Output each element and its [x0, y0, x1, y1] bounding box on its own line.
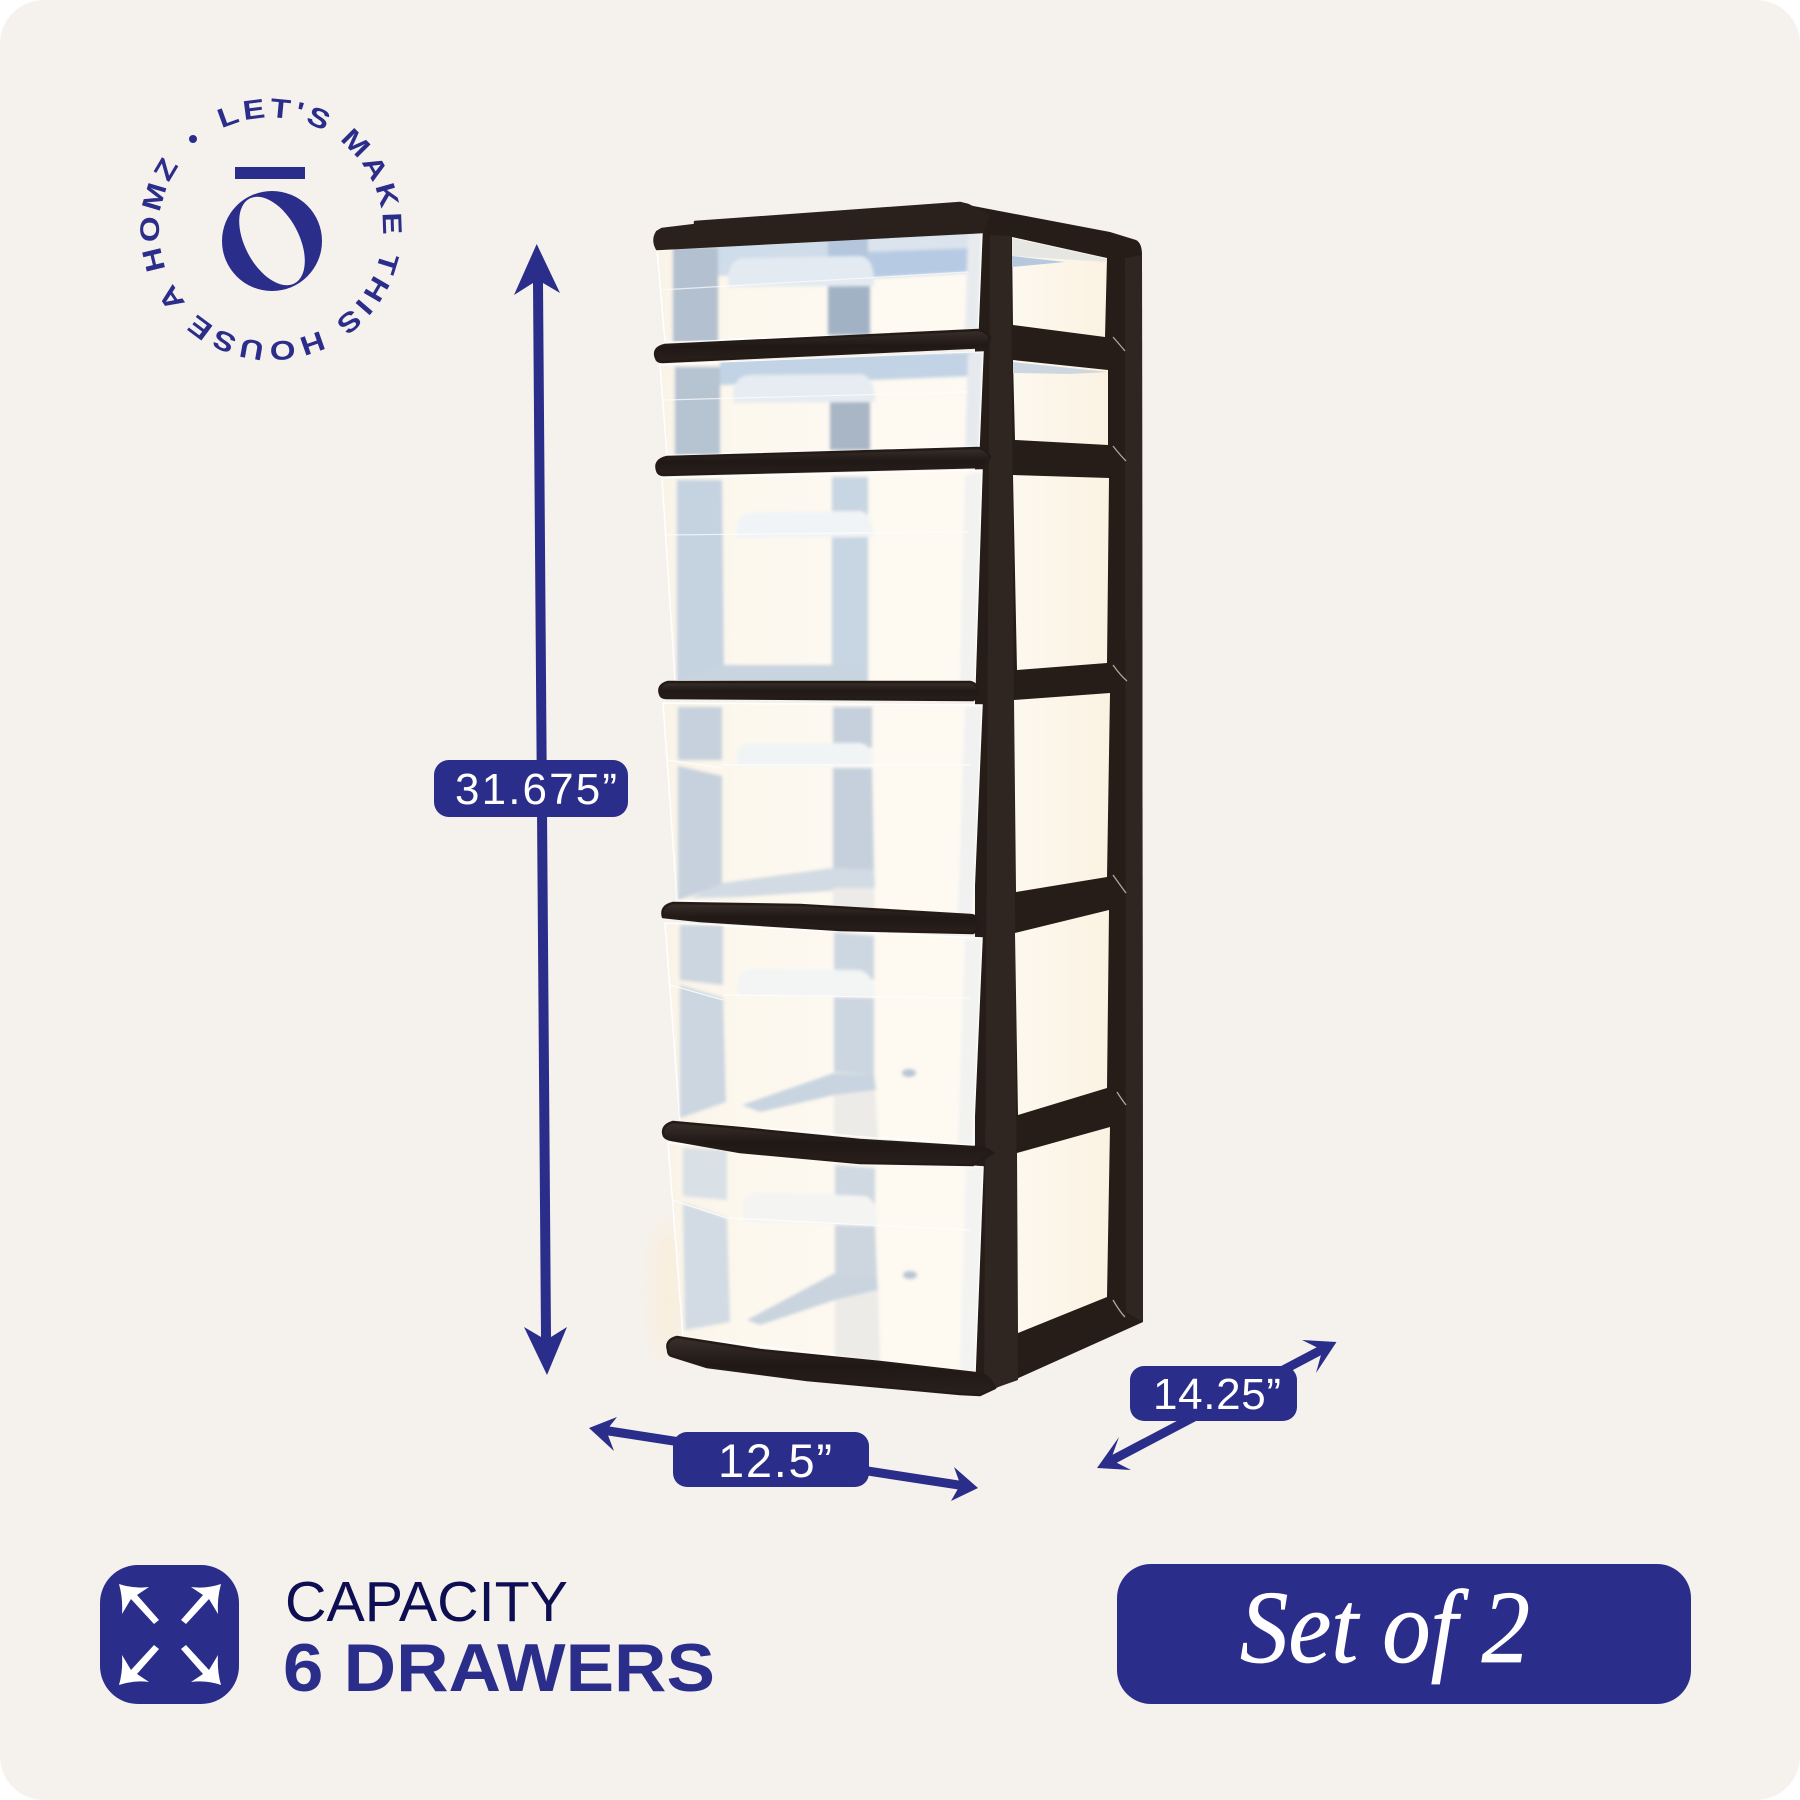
- drawer 5: [665, 923, 982, 1145]
- depth label: 14.25”: [1153, 1370, 1281, 1419]
- frame highlights: [1113, 337, 1127, 1317]
- rail 2: [655, 330, 990, 362]
- back pillar shading: [1125, 255, 1143, 1322]
- height label: 31.675”: [455, 765, 617, 814]
- width label: [673, 1432, 869, 1487]
- side windows: [1012, 237, 1110, 1333]
- set of 2 badge: [1117, 1564, 1691, 1704]
- capacity text: CAPACITY: [285, 1570, 568, 1634]
- capacity text: [283, 1570, 715, 1706]
- rail 4: [659, 682, 978, 700]
- drawer 6: [668, 1143, 983, 1373]
- rail 6: [663, 1122, 993, 1165]
- capacity text: 6 DRAWERS: [283, 1630, 715, 1706]
- tower frame side: [960, 203, 1143, 1393]
- rail 5: [662, 903, 979, 933]
- warm floor glow: [654, 1220, 682, 1360]
- height arrow: [514, 244, 567, 1375]
- logo dot: [189, 135, 197, 143]
- drawer 1: [657, 226, 982, 342]
- drawer 4: [663, 703, 982, 915]
- icon: capacity arrows: [100, 1565, 239, 1704]
- top rail and lid: [654, 203, 988, 249]
- logo letter o: [222, 186, 322, 296]
- rail 7 base: [667, 1337, 995, 1395]
- width arrow: [589, 1417, 978, 1501]
- logo badge: [140, 98, 402, 360]
- circular tagline: LET'S MAKE THIS HOUSE A HOMZ: [140, 98, 402, 360]
- set of 2 badge: Set of 2: [1240, 1570, 1530, 1685]
- rail 3: [656, 448, 990, 475]
- depth arrow: [1097, 1340, 1336, 1470]
- drawer 3: [662, 470, 982, 684]
- depth label: [1130, 1366, 1297, 1421]
- drawer 2: [660, 352, 983, 455]
- width label: 12.5”: [718, 1434, 832, 1487]
- product: six drawer storage tower: [654, 203, 1143, 1395]
- center pillar shading: [984, 235, 1018, 1392]
- logo bar: [235, 167, 305, 179]
